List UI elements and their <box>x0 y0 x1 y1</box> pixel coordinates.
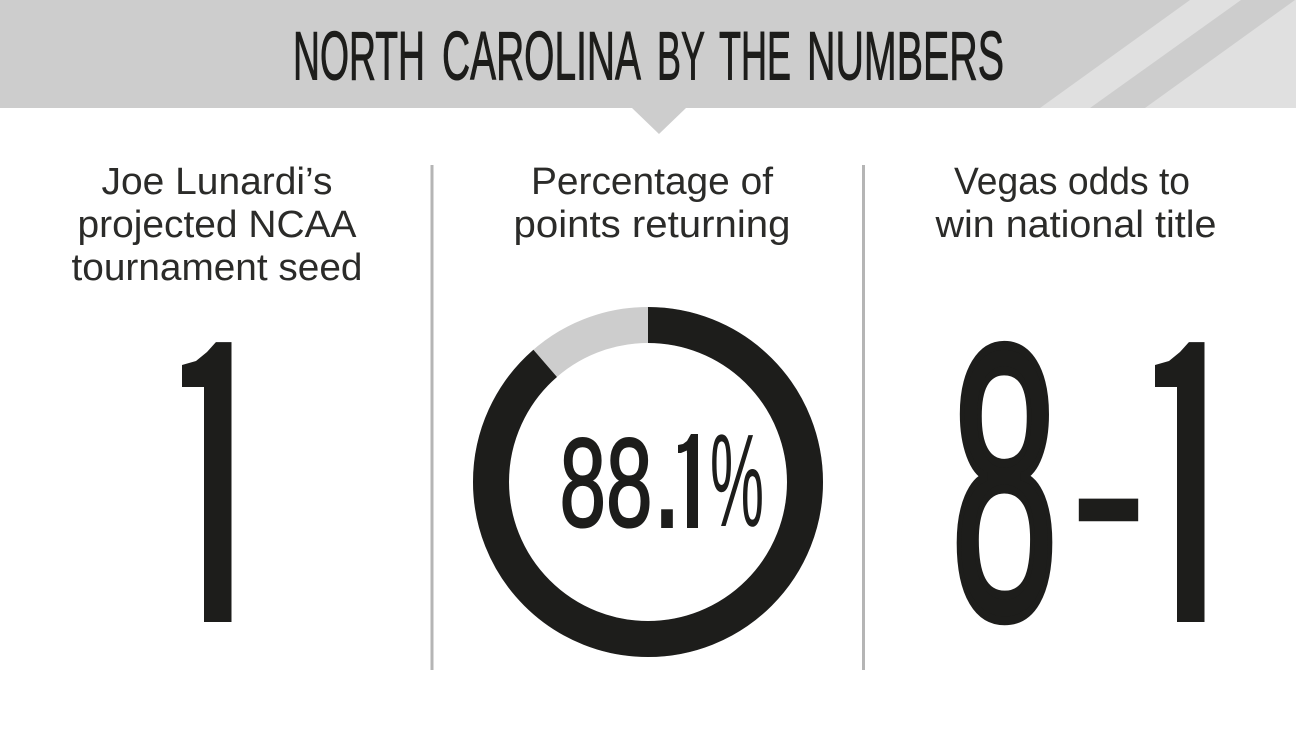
donut value: . <box>650 371 684 566</box>
title: NORTH <box>293 18 425 94</box>
caption: projected seed <box>72 161 362 289</box>
caption: projected seed: tournament seed <box>72 247 362 289</box>
caption: points returning: points returning <box>514 204 790 246</box>
big number: odds 8-1 <box>956 340 1204 626</box>
big number: odds 8-1: 8 <box>950 266 1058 700</box>
title <box>293 18 1004 94</box>
title: THE <box>719 18 791 94</box>
caption: projected seed: Joe Lunardi’s <box>102 161 332 203</box>
column dividers <box>430 165 865 670</box>
caption: points returning <box>514 161 790 246</box>
donut value <box>562 434 762 528</box>
text: 1 <box>159 266 269 713</box>
donut value: 1 <box>669 409 713 559</box>
donut value: 88 <box>560 412 652 554</box>
caption: Vegas odds: win national title <box>934 204 1216 246</box>
big number: odds 8-1: - <box>1068 325 1149 649</box>
caption: Vegas odds <box>934 161 1216 246</box>
caption: points returning: Percentage of <box>531 161 773 203</box>
caption: projected seed: projected NCAA <box>78 204 357 246</box>
caption: Vegas odds: Vegas odds to <box>954 161 1190 203</box>
donut chart: 88.1 percent <box>491 325 805 639</box>
title: CAROLINA <box>442 18 641 94</box>
header banner <box>0 0 1296 134</box>
title: NUMBERS <box>807 18 1004 94</box>
title: BY <box>657 18 705 94</box>
text: % <box>710 407 764 554</box>
